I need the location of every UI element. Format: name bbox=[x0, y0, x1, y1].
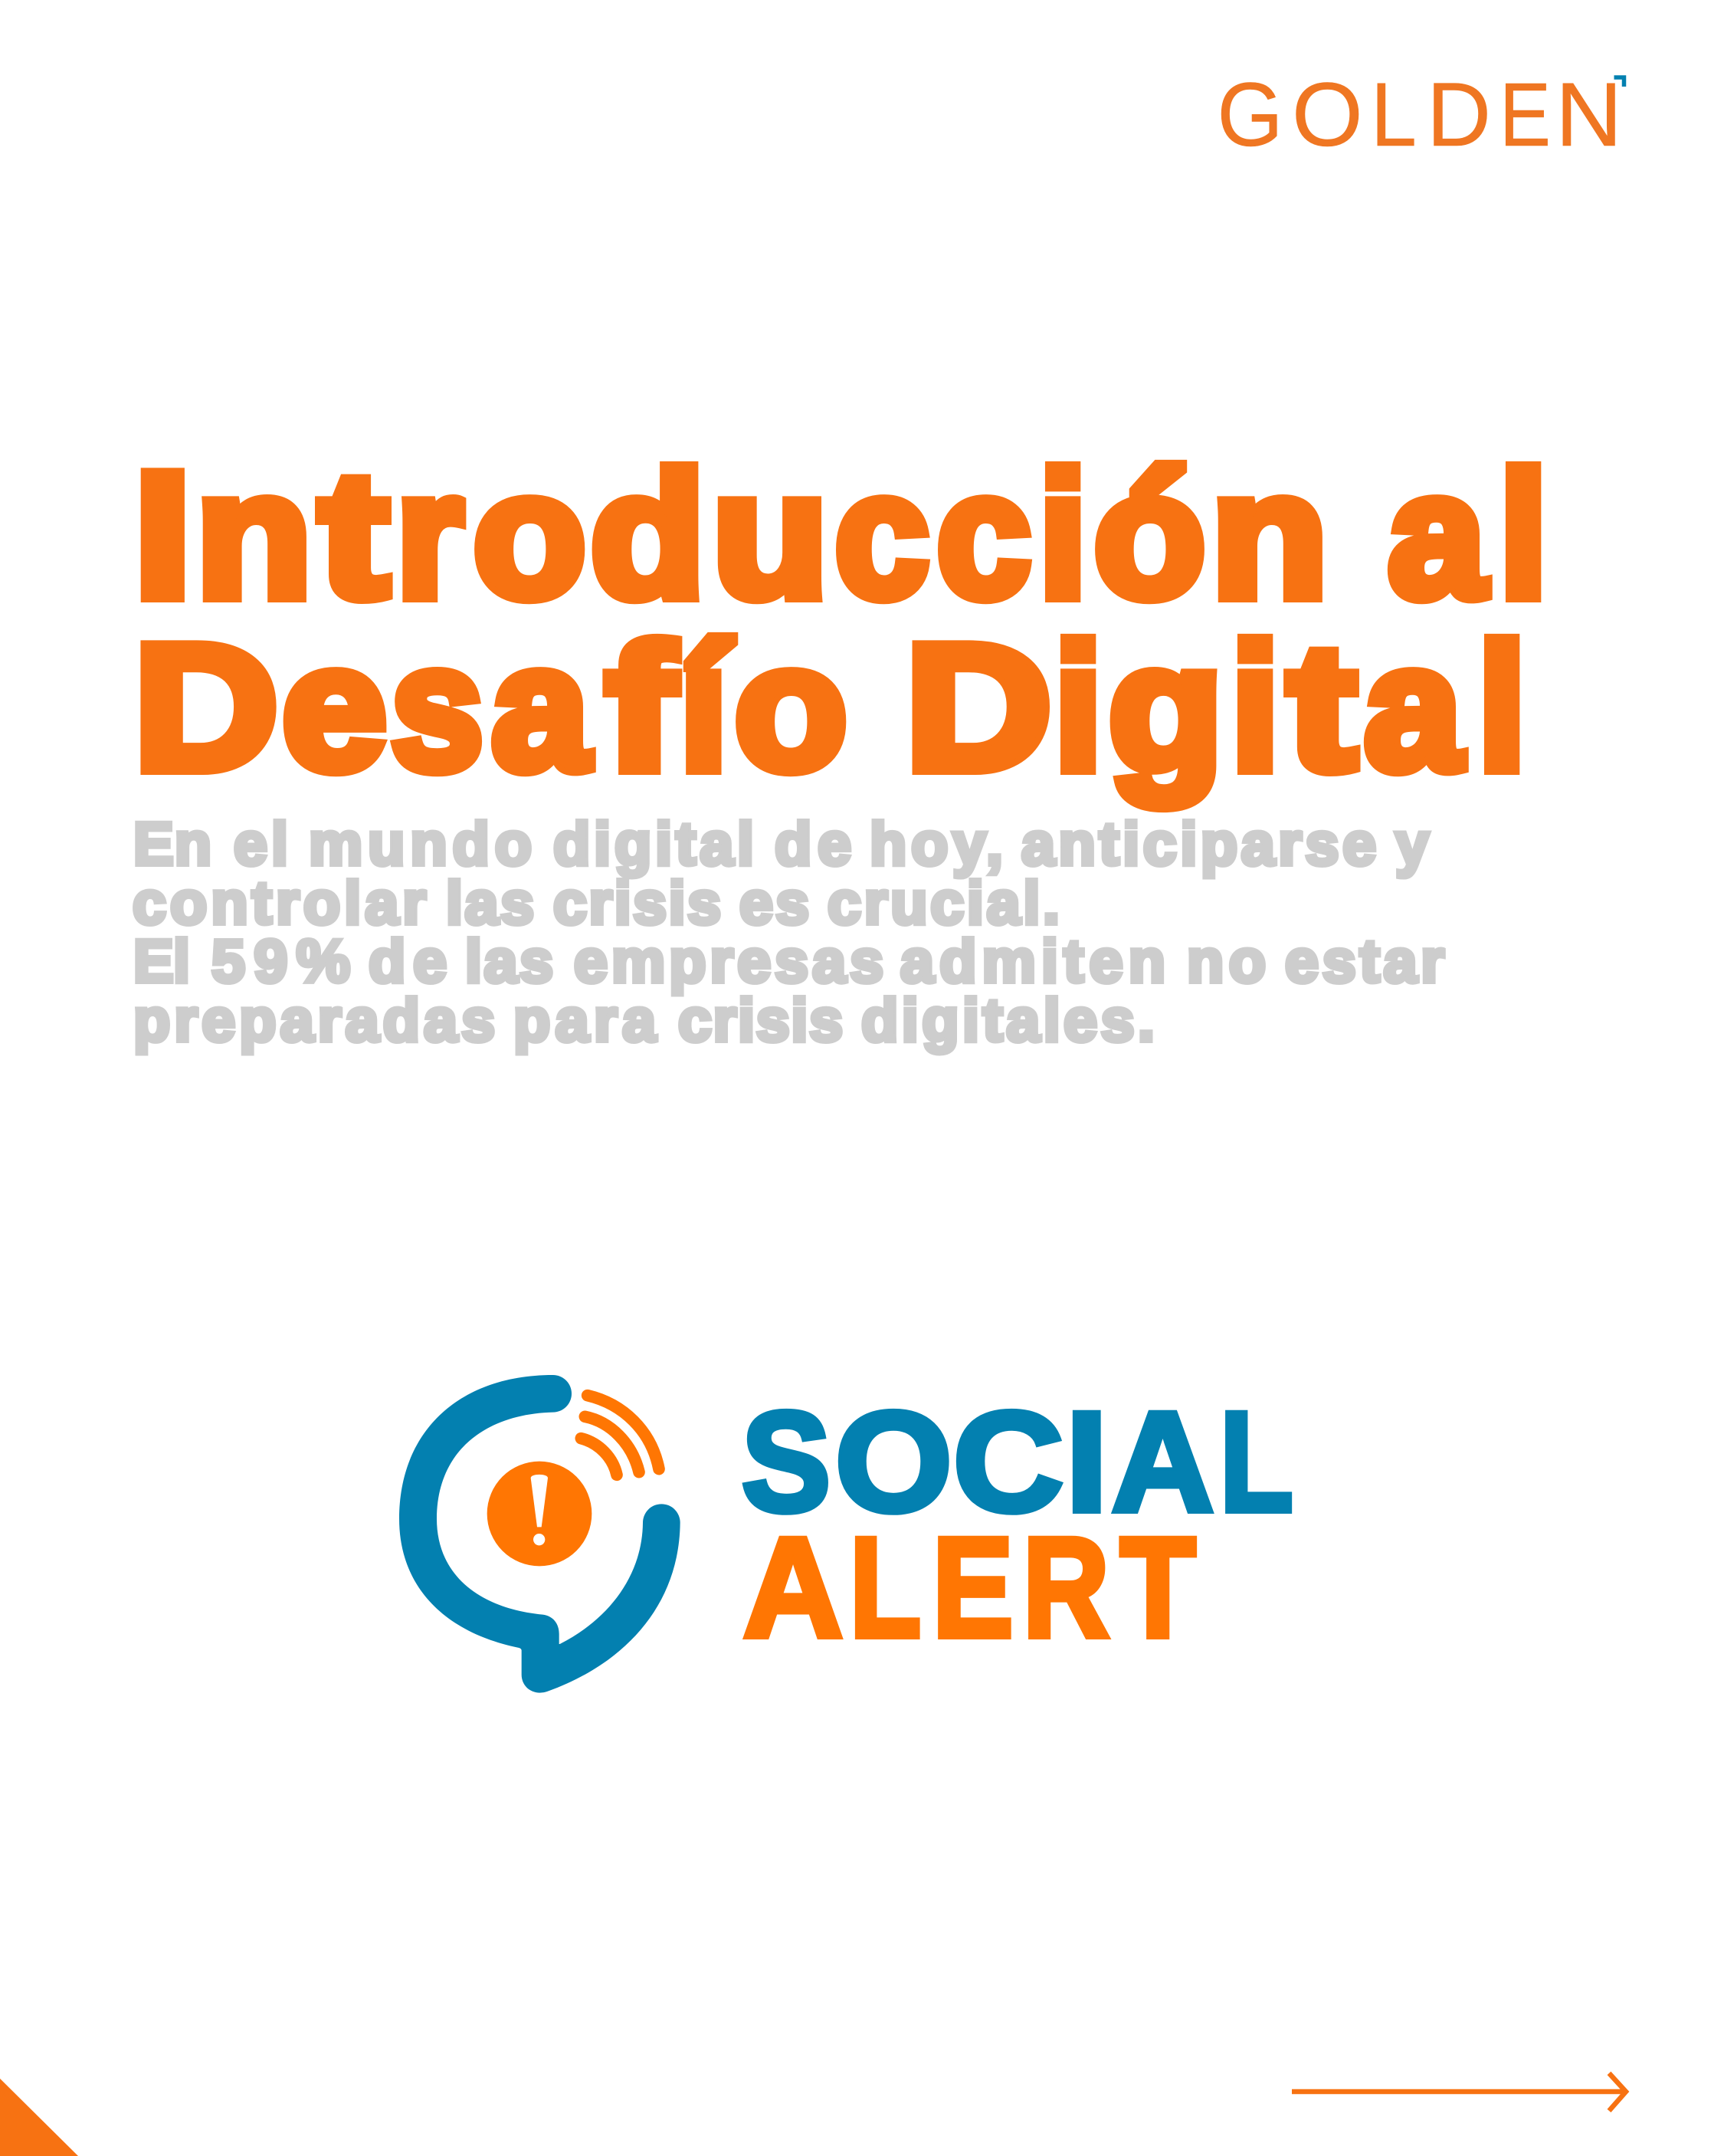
title: í bbox=[680, 609, 733, 807]
subtitle text: no bbox=[1187, 927, 1266, 995]
title: o bbox=[735, 609, 847, 807]
title: d bbox=[591, 436, 705, 635]
title: c bbox=[937, 436, 1031, 635]
logo: GOLDEN: N bbox=[1555, 64, 1622, 166]
title: t bbox=[320, 436, 388, 635]
wordmark: SOCIAL: I bbox=[1066, 1383, 1108, 1541]
wordmark: ALERT: E bbox=[932, 1509, 1013, 1667]
alert circle bbox=[487, 1462, 592, 1566]
title: u bbox=[713, 436, 828, 635]
wordmark: ALERT: L bbox=[850, 1509, 921, 1667]
title: n bbox=[196, 436, 312, 635]
subtitle text: anticiparse bbox=[1021, 809, 1376, 878]
title: i bbox=[1039, 436, 1087, 635]
subtitle text: estar bbox=[1285, 927, 1444, 995]
subtitle text: las bbox=[465, 927, 553, 995]
wordmark: SOCIAL: L bbox=[1220, 1383, 1293, 1541]
speech bubble outline bbox=[399, 1375, 680, 1693]
wordmark: ALERT: R bbox=[1023, 1509, 1109, 1667]
title: i bbox=[1231, 609, 1280, 807]
subtitle text: para bbox=[513, 986, 657, 1054]
title: f bbox=[606, 609, 675, 807]
subtitle text: En bbox=[133, 809, 211, 878]
icon: speech bubble alert bbox=[399, 1375, 680, 1693]
title: c bbox=[835, 436, 929, 635]
wordmark: SOCIAL: O bbox=[835, 1383, 952, 1541]
title: l bbox=[1478, 609, 1526, 807]
subtitle text: El bbox=[133, 927, 190, 995]
wordmark: ALERT: T bbox=[1120, 1509, 1195, 1667]
subtitle text: preparadas bbox=[133, 986, 495, 1054]
wordmark: SOCIAL bbox=[742, 1383, 1293, 1541]
exclamation mark bbox=[531, 1475, 548, 1545]
subtitle text: controlar bbox=[133, 868, 426, 937]
subtitle text: de bbox=[369, 927, 447, 995]
subtitle text: de bbox=[775, 809, 851, 878]
wordmark: SOCIAL: C bbox=[953, 1383, 1064, 1541]
title: n bbox=[1211, 436, 1328, 635]
corner triangle bbox=[0, 2079, 78, 2156]
logo: GOLDEN: L bbox=[1371, 64, 1417, 166]
wordmark: SOCIAL: A bbox=[1112, 1383, 1214, 1541]
subtitle text: hoy, bbox=[870, 809, 1003, 878]
subtitle text: las bbox=[446, 868, 534, 937]
subtitle text bbox=[133, 809, 1444, 1054]
logo: GOLDEN: O bbox=[1292, 64, 1363, 166]
title bbox=[134, 436, 1548, 807]
title: t bbox=[1288, 609, 1356, 807]
subtitle text: es bbox=[739, 868, 809, 937]
logo: GOLDEN: D bbox=[1427, 64, 1491, 166]
title: I bbox=[134, 436, 192, 635]
title: i bbox=[1054, 609, 1102, 807]
subtitle text: el bbox=[234, 809, 288, 878]
subtitle text: digital bbox=[553, 809, 754, 878]
subtitle text: admiten bbox=[900, 927, 1165, 995]
wordmark: SOCIAL: S bbox=[742, 1383, 831, 1541]
title: l bbox=[1499, 436, 1548, 635]
logo: GOLDEN bbox=[1217, 64, 1624, 166]
logo: GOLDEN: E bbox=[1499, 64, 1551, 166]
subtitle text: y bbox=[1395, 809, 1429, 878]
title: r bbox=[397, 436, 463, 635]
title: a bbox=[492, 609, 590, 807]
subtitle text: crisis bbox=[553, 868, 721, 937]
title: g bbox=[1109, 609, 1223, 807]
title: D bbox=[134, 609, 278, 807]
title: D bbox=[906, 609, 1051, 807]
subtitle text: empresas bbox=[574, 927, 883, 995]
wordmark: ALERT: A bbox=[743, 1509, 843, 1667]
title: a bbox=[1365, 609, 1463, 807]
title: o bbox=[474, 436, 585, 635]
title: a bbox=[1388, 436, 1486, 635]
wordmark: ALERT bbox=[743, 1509, 1195, 1667]
subtitle text: crucial. bbox=[828, 868, 1060, 937]
signal waves bbox=[581, 1396, 659, 1475]
subtitle text: digitales. bbox=[861, 986, 1155, 1054]
subtitle text: crisis bbox=[678, 986, 843, 1054]
title: ó bbox=[1094, 436, 1205, 635]
arrow bbox=[1292, 2073, 1626, 2111]
subtitle text: 59% bbox=[211, 927, 350, 995]
logo: GOLDEN: G bbox=[1217, 64, 1283, 166]
title: e bbox=[282, 609, 386, 807]
title: s bbox=[391, 609, 483, 807]
subtitle text: mundo bbox=[309, 809, 532, 878]
